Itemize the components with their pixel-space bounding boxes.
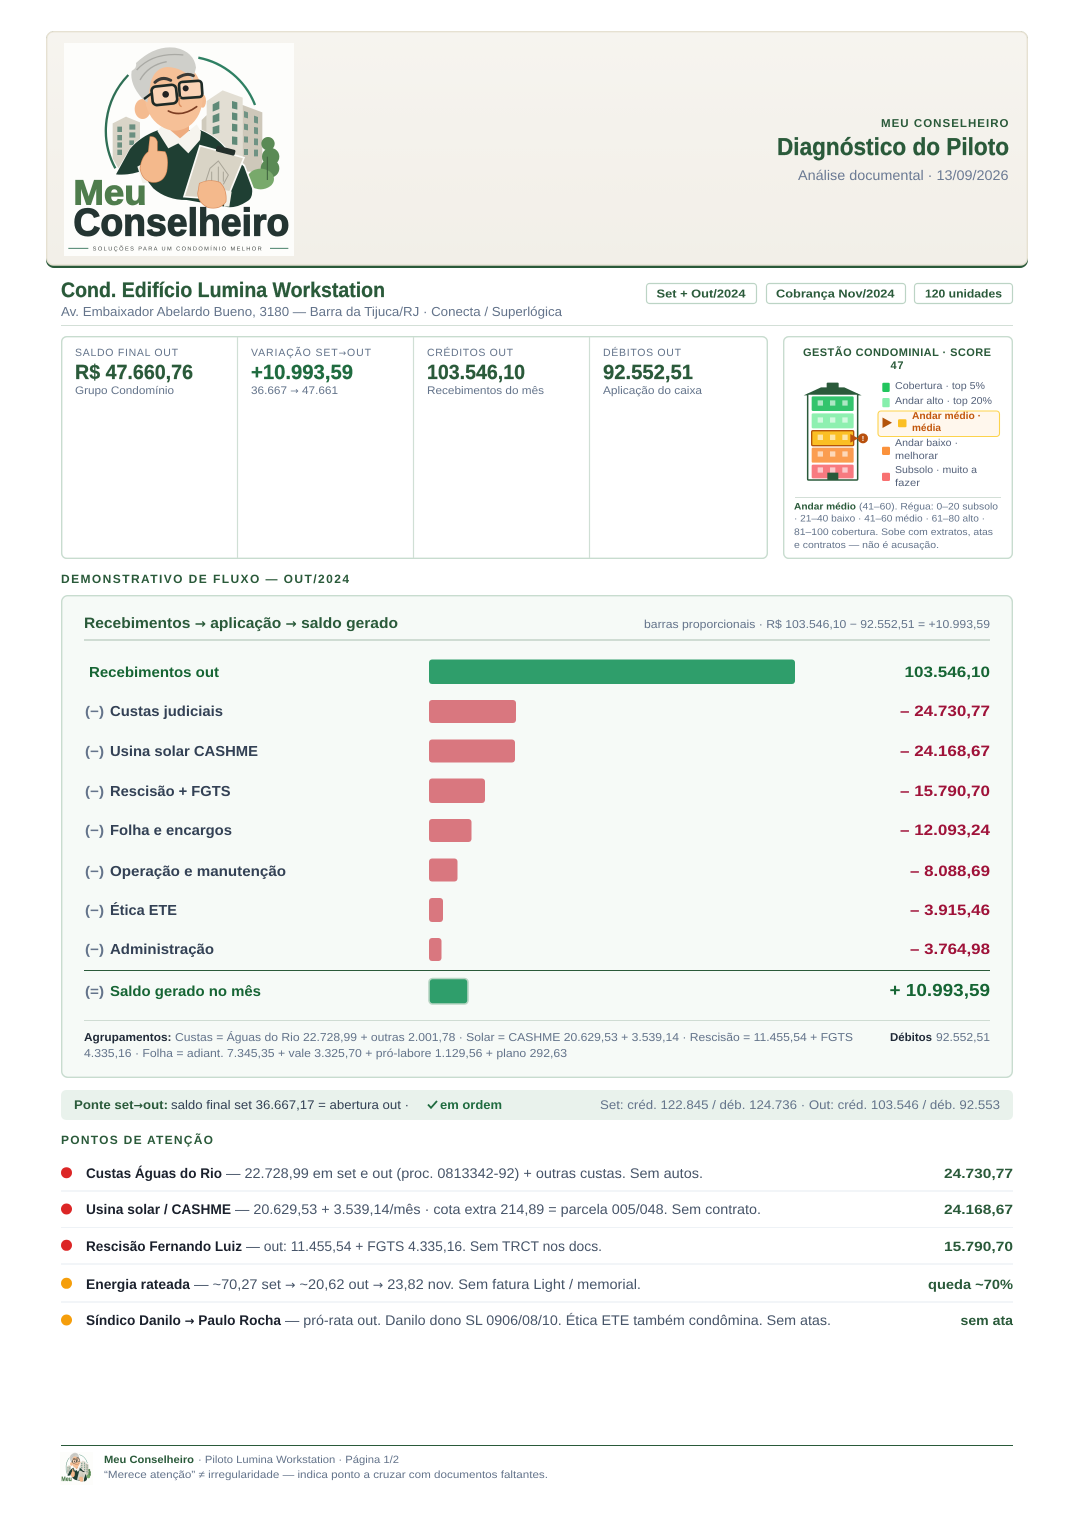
score note: Andar médio <box>794 502 856 512</box>
bridge strip: ponte set→out: Ponte set →out: <box>74 1098 168 1112</box>
item: custas águas do rio: Custas Águas do Rio <box>86 1165 222 1181</box>
item: energia rateada <box>61 1276 1013 1292</box>
score note: 81–100 cobertura. Sobe com extratos, atas <box>794 527 993 538</box>
attention list <box>61 1165 1013 1328</box>
row: administração <box>85 938 990 961</box>
logo: Meu Conselheiro: Conselheiro <box>73 201 289 244</box>
row: operação: Operação e manutenção <box>110 864 286 880</box>
panel: cash flow chart <box>62 596 1012 1077</box>
panel: KPI cards <box>62 337 767 558</box>
score title <box>803 346 991 372</box>
row: folha: – 12.093,24 <box>900 822 991 839</box>
footer text <box>104 1454 548 1481</box>
item: energia rateada: Energia rateada <box>86 1276 190 1292</box>
footer logo <box>61 1452 91 1482</box>
header title: Diagnóstico do Piloto <box>777 134 1009 161</box>
footer <box>60 1446 1013 1485</box>
row: saldo gerado: (=) <box>85 983 104 999</box>
icon: building gauge: ! <box>862 434 864 443</box>
KPI: saldo final: SALDO FINAL OUT <box>75 347 179 359</box>
tag: period: Set + Out/2024 <box>656 288 746 300</box>
row: folha: (−) <box>85 822 104 838</box>
header subtitle: Análise documental · 13/09/2026 <box>798 167 1009 183</box>
icon: building gauge <box>804 383 868 480</box>
legend: fazer <box>895 478 921 489</box>
item: usina solar <box>61 1201 1013 1217</box>
KPI: variação: 36.667 → 47.661 <box>251 385 338 397</box>
KPI: créditos <box>427 346 545 397</box>
row: saldo gerado: + 10.993,59 <box>890 980 990 1000</box>
item: rescisão: 15.790,70 <box>944 1239 1013 1254</box>
legend: melhorar <box>895 451 939 462</box>
groupings note: Agrupamentos: <box>84 1032 172 1044</box>
KPI: créditos: CRÉDITOS OUT <box>427 346 514 359</box>
row: recebimentos: 103.546,10 <box>904 664 990 681</box>
row: folha: Folha e encargos <box>110 823 232 839</box>
row: recebimentos: Recebimentos out <box>89 665 219 681</box>
row: custas judiciais: (−) <box>85 703 104 719</box>
row: custas judiciais <box>85 700 990 723</box>
logo: Meu Conselheiro <box>64 43 294 256</box>
row: custas judiciais: Custas judiciais <box>110 704 223 720</box>
KPI: variação: VARIAÇÃO SET→OUT <box>251 346 372 359</box>
legend <box>878 381 1000 489</box>
row: operação <box>85 858 990 882</box>
address: Av. Embaixador Abelardo Bueno, 3180 — Barra da Tijuca/RJ · Conecta / Superlógica <box>61 304 563 319</box>
item: síndico: sem ata <box>960 1313 1013 1328</box>
item: usina solar: — 20.629,53 + 3.539,14/mês · cota extra 214,89 = parcela 005/048. Sem contrato. <box>235 1201 761 1217</box>
row: rescisão: (−) <box>85 783 104 799</box>
row: administração: – 3.764,98 <box>910 941 990 958</box>
footer logo: Meu <box>61 1475 72 1482</box>
item: síndico: Síndico Danilo → Paulo Rocha <box>86 1312 281 1328</box>
footer text: “Merece atenção” ≠ irregularidade — indica ponto a cruzar com documentos faltantes. <box>104 1469 548 1481</box>
highlighted level: andar médio <box>878 411 1000 436</box>
score note <box>794 502 998 551</box>
groupings note: 4.335,16 · Folha = adiant. 7.345,35 + vale 3.325,70 + pró-labore 1.129,56 + plano 292,63 <box>84 1048 567 1060</box>
row: saldo gerado <box>85 978 990 1004</box>
row: ética: Ética ETE <box>110 902 177 919</box>
legend: Andar alto · top 20% <box>895 396 992 407</box>
bridge strip: ponte set→out: em ordem <box>440 1098 502 1112</box>
row: administração: Administração <box>110 942 214 958</box>
panel: score de gestão <box>784 337 1012 558</box>
tag: units: 120 unidades <box>925 288 1002 300</box>
tag: billing: Cobrança Nov/2024 <box>776 288 895 300</box>
row: rescisão: – 15.790,70 <box>900 783 990 800</box>
row: usina solar: – 24.168,67 <box>900 743 990 760</box>
item: custas águas do rio <box>61 1165 1013 1181</box>
legend: Cobertura · top 5% <box>895 381 985 392</box>
score note: e contratos — não é acusação. <box>794 540 939 551</box>
row: folha <box>85 819 991 842</box>
footer text: · Piloto Lumina Workstation · Página 1/2 <box>198 1454 399 1466</box>
score note: · 21–40 baixo · 41–60 médio · 61–80 alto · <box>794 514 985 524</box>
KPI: créditos: 103.546,10 <box>427 361 525 384</box>
KPI: débitos: DÉBITOS OUT <box>603 346 682 359</box>
KPI: débitos: Aplicação do caixa <box>603 385 703 397</box>
item: síndico <box>61 1312 1013 1328</box>
row: ética: (−) <box>85 902 104 918</box>
item: custas águas do rio: 24.730,77 <box>944 1166 1013 1181</box>
debits note: 92.552,51 <box>936 1032 990 1044</box>
score title: 47 <box>890 360 904 372</box>
row: operação: (−) <box>85 863 104 879</box>
bridge strip: ponte set→out: saldo final set 36.667,17 = abertura out · <box>171 1098 409 1112</box>
item: usina solar: Usina solar / CASHME <box>86 1201 231 1217</box>
row: ética: – 3.915,46 <box>910 902 990 919</box>
item: rescisão: — out: 11.455,54 + FGTS 4.335,16. Sem TRCT nos docs. <box>246 1238 602 1254</box>
item: usina solar: 24.168,67 <box>944 1202 1013 1217</box>
item: custas águas do rio: — 22.728,99 em set e out (proc. 0813342-92) + outras custas. Sem autos. <box>226 1165 703 1181</box>
logo: Meu Conselheiro: Meu <box>73 173 147 212</box>
debits note: Débitos <box>890 1032 932 1044</box>
row: ética <box>85 898 990 922</box>
row: usina solar <box>85 740 990 762</box>
row: usina solar: (−) <box>85 743 104 759</box>
KPI: variação <box>251 346 372 397</box>
tag: units <box>914 284 1012 304</box>
header panel <box>46 31 1028 268</box>
row: operação: – 8.088,69 <box>910 863 990 880</box>
chart formula: barras proporcionais · R$ 103.546,10 − 92.552,51 = +10.993,59 <box>644 619 990 631</box>
row: administração: (−) <box>85 941 104 957</box>
bridge strip: ponte set→out <box>61 1090 1013 1120</box>
bridge strip: ponte set→out: Set: créd. 122.845 / déb. 124.736 · Out: créd. 103.546 / déb. 92.553 <box>600 1098 1000 1112</box>
chart heading: Recebimentos → aplicação → saldo gerado <box>84 615 398 632</box>
row: saldo gerado: Saldo gerado no mês <box>110 984 261 1000</box>
KPI: créditos: Recebimentos do mês <box>427 385 545 397</box>
legend: Andar baixo · <box>895 438 958 449</box>
item: energia rateada: queda ~70% <box>928 1277 1013 1292</box>
highlighted level: andar médio: Andar médio · <box>912 411 981 422</box>
KPI: débitos: 92.552,51 <box>603 361 693 384</box>
KPI: saldo final <box>75 347 193 397</box>
highlighted level: andar médio: média <box>912 423 941 434</box>
header eyebrow: MEU CONSELHEIRO <box>881 118 1009 130</box>
debits note <box>890 1032 990 1044</box>
section heading: pontos de atenção: PONTOS DE ATENÇÃO <box>61 1133 213 1147</box>
item: rescisão <box>61 1238 1013 1254</box>
item: síndico: — pró-rata out. Danilo dono SL 0906/08/10. Ética ETE também condômina. Sem atas. <box>285 1312 831 1328</box>
groupings note <box>84 1031 853 1060</box>
score title: GESTÃO CONDOMINIAL · SCORE <box>803 346 991 359</box>
legend: Subsolo · muito a <box>895 465 977 476</box>
KPI: saldo final: R$ 47.660,76 <box>75 361 193 384</box>
row: rescisão: Rescisão + FGTS <box>110 784 231 800</box>
row: rescisão <box>85 778 990 803</box>
row: usina solar: Usina solar CASHME <box>110 744 258 760</box>
condominium name: Cond. Edifício Lumina Workstation <box>61 279 385 302</box>
item: energia rateada: — ~70,27 set → ~20,62 out → 23,82 nov. Sem fatura Light / memorial. <box>194 1276 641 1292</box>
logo: Meu Conselheiro: SOLUÇÕES PARA UM CONDOMÍNIO MELHOR <box>93 245 262 252</box>
tag: billing <box>766 284 906 304</box>
KPI: saldo final: Grupo Condomínio <box>75 385 174 397</box>
row: recebimentos <box>89 660 990 684</box>
section heading: demonstrativo: DEMONSTRATIVO DE FLUXO — OUT/2024 <box>61 572 349 586</box>
score note: (41–60). Régua: 0–20 subsolo <box>859 502 998 512</box>
item: rescisão: Rescisão Fernando Luiz <box>86 1238 242 1254</box>
row: custas judiciais: – 24.730,77 <box>900 703 990 720</box>
footer text: Meu Conselheiro <box>104 1454 194 1466</box>
KPI: débitos <box>603 346 703 397</box>
KPI: variação: +10.993,59 <box>251 361 353 384</box>
groupings note: Custas = Águas do Rio 22.728,99 + outras 2.001,78 · Solar = CASHME 20.629,53 + 3.539,14 · Rescisão = 11.455,54 + FGTS <box>175 1031 853 1044</box>
tag: period <box>646 284 756 304</box>
